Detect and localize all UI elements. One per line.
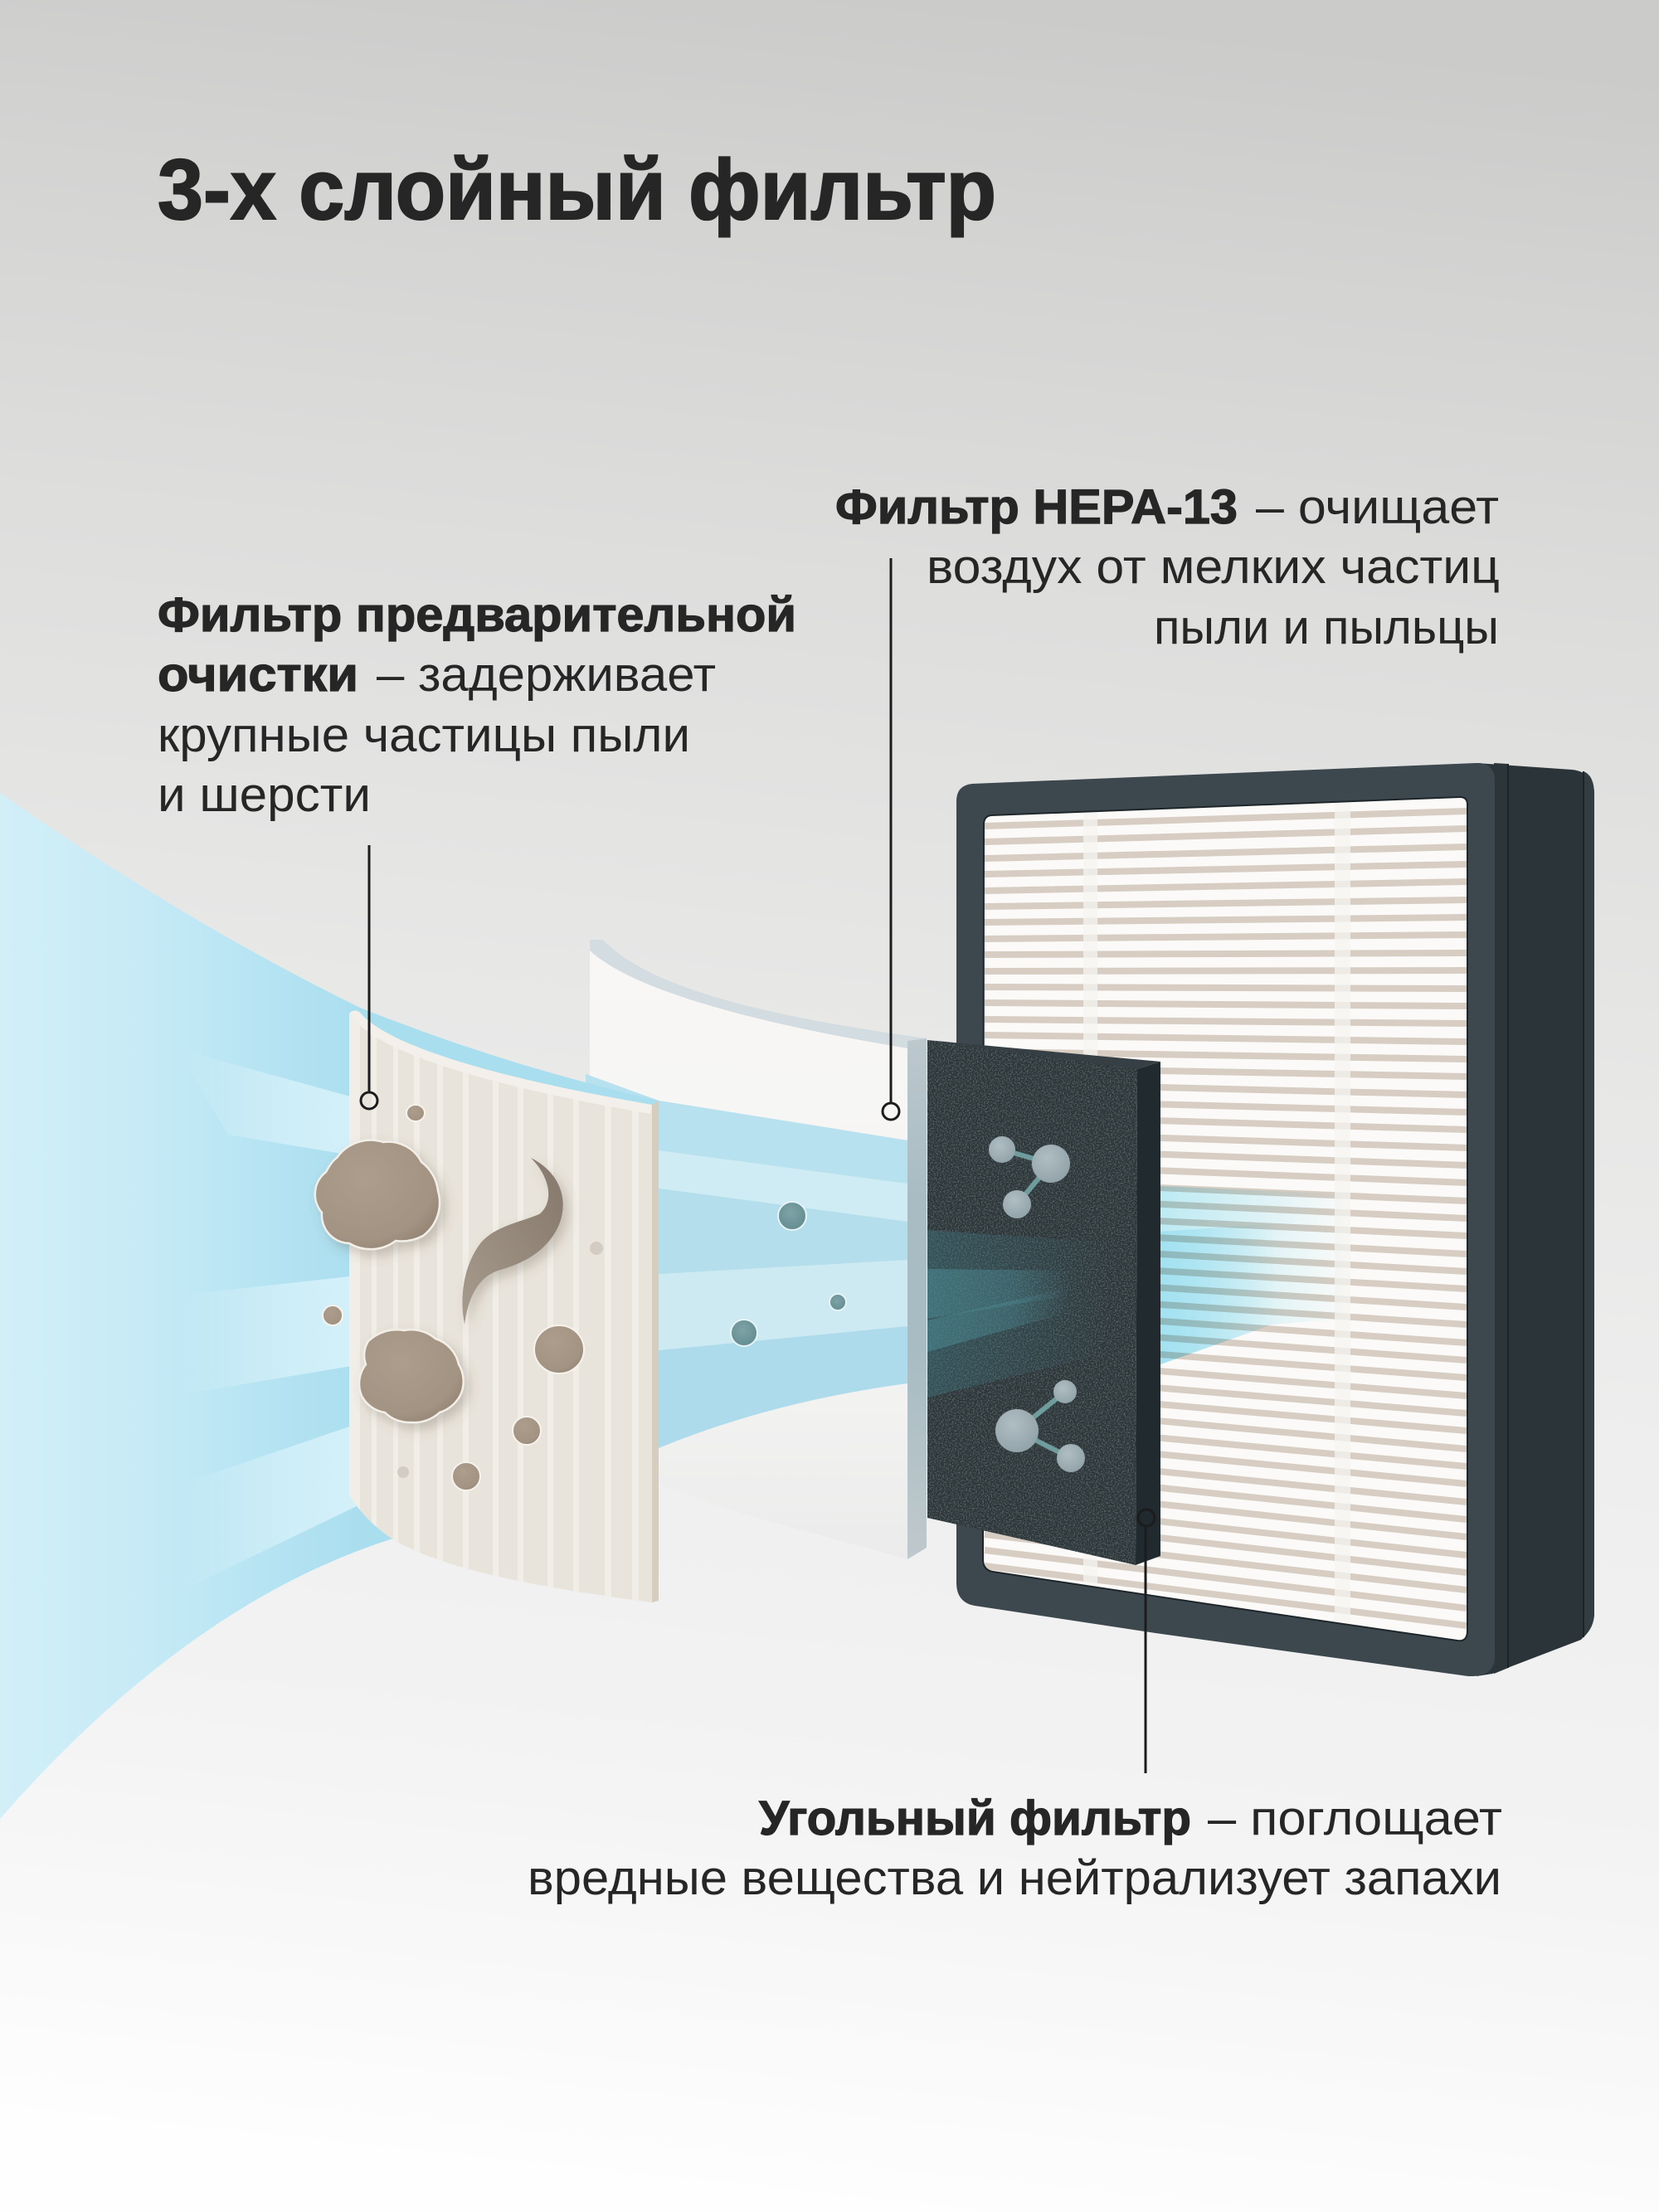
- text block: HEPA description: – очищает: [1256, 480, 1499, 534]
- text block: prefilter description: очистки: [158, 648, 358, 702]
- text block: carbon description: Угольный фильтр: [759, 1791, 1191, 1845]
- leader line: carbon: [1138, 1510, 1155, 1773]
- prefilter front: [349, 1010, 652, 1602]
- leader line: HEPA: [883, 558, 899, 1120]
- window recess: [982, 796, 1468, 1641]
- text block: HEPA description: [835, 480, 1500, 654]
- icon: molecule upper: [989, 1136, 1070, 1218]
- icon: molecule lower: [995, 1380, 1085, 1472]
- airflow left: [0, 793, 659, 1819]
- carbon front face: [927, 1040, 1137, 1565]
- particle: teal medium: [731, 1320, 757, 1346]
- title: 3-х слойный фильтр: [158, 142, 996, 237]
- text block: prefilter description: Фильтр предварительной: [158, 588, 796, 642]
- faint marks: [397, 1242, 603, 1478]
- text block: HEPA description: пыли и пыльцы: [1154, 600, 1499, 654]
- prefilter panel: [315, 995, 659, 1609]
- airflow through panel: [586, 1074, 907, 1448]
- panel edge: [907, 1038, 927, 1559]
- text block: prefilter description: [158, 588, 796, 822]
- text block: carbon description: вредные вещества и нейтрализует запахи: [528, 1851, 1501, 1905]
- fine dust filter panel: [581, 940, 927, 1559]
- particle: teal large: [778, 1202, 806, 1230]
- carbon filter: [927, 1040, 1160, 1565]
- text block: HEPA description: воздух от мелких частиц: [927, 540, 1500, 594]
- HEPA side wall: [1477, 763, 1594, 1676]
- text block: carbon description: – поглощает: [1208, 1791, 1502, 1845]
- text block: prefilter description: крупные частицы пыли: [158, 708, 690, 762]
- text block: HEPA description: Фильтр HEPA-13: [835, 480, 1238, 534]
- carbon top edge: [927, 1040, 1160, 1069]
- pleated media: [979, 792, 1472, 1646]
- text block: carbon description: [528, 1791, 1502, 1905]
- HEPA filter: [956, 763, 1594, 1676]
- carbon side edge: [1136, 1062, 1160, 1565]
- dust cloud upper: [315, 1140, 440, 1249]
- prefilter edge: [652, 1101, 659, 1602]
- leader line: prefilter: [361, 845, 377, 1109]
- particle: teal small: [830, 1294, 846, 1310]
- prefilter ribs: [348, 995, 652, 1609]
- text block: prefilter description: – задерживает: [377, 648, 716, 702]
- airflow behind carbon filter: [1160, 1186, 1324, 1364]
- dust particles: [323, 1105, 584, 1490]
- HEPA front frame: [956, 763, 1495, 1676]
- panel top thickness: [590, 940, 927, 1048]
- air through carbon: [927, 1230, 1112, 1398]
- text block: prefilter description: и шерсти: [158, 768, 371, 822]
- dust cloud lower: [359, 1330, 464, 1422]
- panel front: [590, 950, 907, 1559]
- hair: [462, 1158, 563, 1325]
